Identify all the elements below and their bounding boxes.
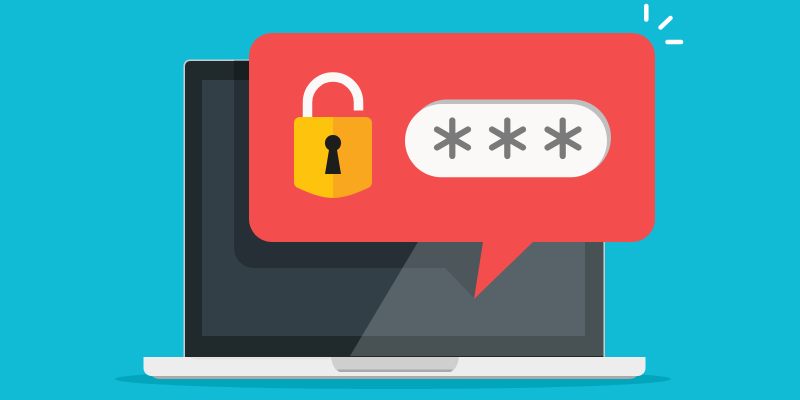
trackpad notch (331, 357, 459, 372)
speech bubble (249, 33, 655, 299)
padlock shackle (308, 77, 358, 118)
icon: open padlock (294, 77, 372, 198)
keyhole (325, 135, 341, 174)
bubble shadow on screen (234, 60, 483, 298)
password asterisks (437, 120, 578, 156)
illustration: laptop with password alert (115, 4, 684, 389)
icon: alert sparkle lines (646, 6, 681, 42)
padlock body (294, 117, 333, 198)
password field (405, 100, 611, 177)
laptop base (144, 357, 646, 379)
laptop shadow (115, 369, 671, 389)
screen glare (350, 242, 604, 356)
laptop screen (184, 60, 605, 357)
